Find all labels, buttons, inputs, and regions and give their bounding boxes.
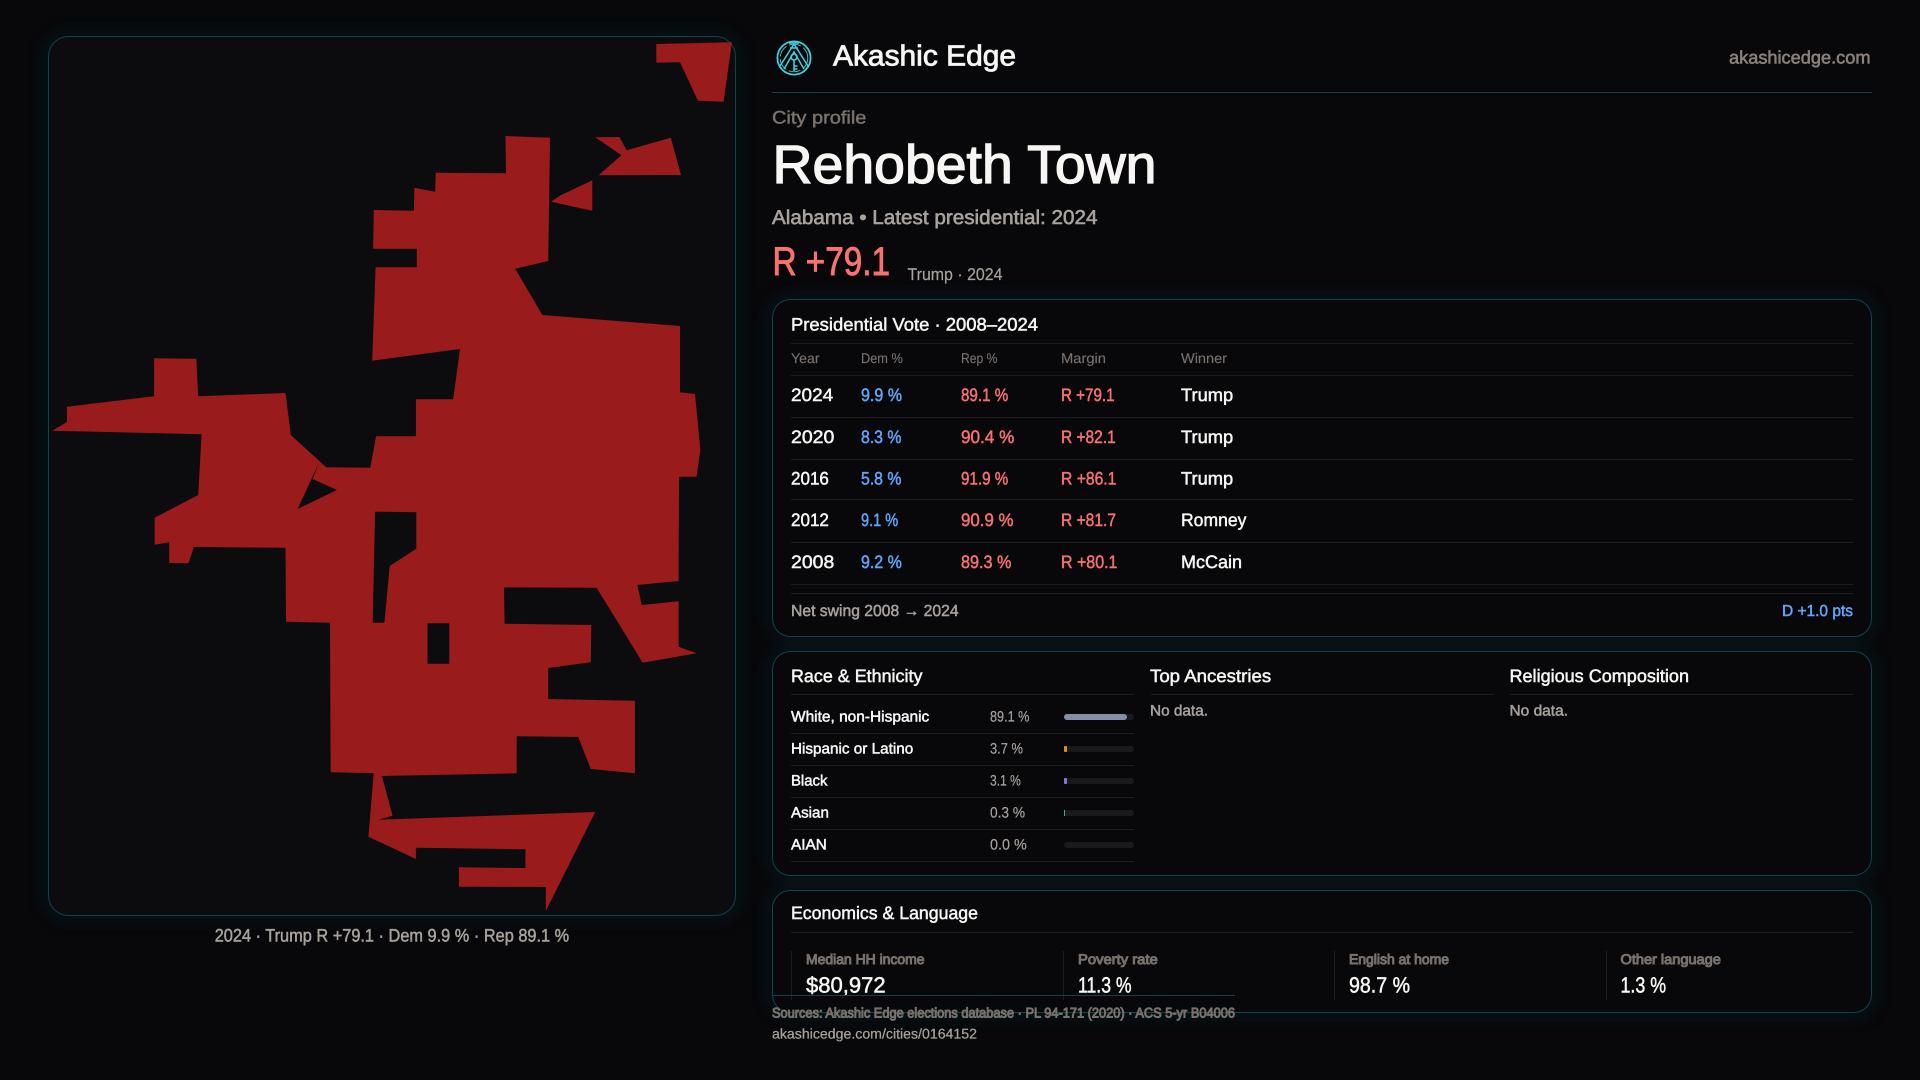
- stat: english at home: English at home: [1349, 951, 1449, 967]
- table header row: Rep %: [961, 350, 997, 366]
- stat: other language: 1.3 %: [1620, 973, 1666, 998]
- race row: black: Black: [791, 773, 828, 790]
- race row: white: [791, 709, 1134, 726]
- race row: hispanic: Hispanic or Latino: [791, 741, 913, 758]
- panel: demographics: [772, 652, 1872, 876]
- table header row: Margin: [1061, 350, 1106, 366]
- table heading: Presidential Vote · 2008–2024: [791, 314, 1038, 334]
- race row: aian: [791, 837, 1134, 854]
- heading: top ancestries: Top Ancestries: [1150, 666, 1271, 686]
- headline margin: R +79.1: [772, 240, 890, 284]
- brand name: Akashic Edge: [833, 41, 1016, 73]
- race row: hispanic: [791, 741, 1134, 758]
- stat: other language: [1620, 951, 1721, 998]
- row 2012: [791, 510, 1246, 530]
- row 2024: 9.9 %: [861, 385, 902, 405]
- row 2008: 9.2 %: [861, 552, 902, 572]
- row 2016: Trump: [1181, 468, 1233, 488]
- footer sources: Sources: Akashic Edge elections database · PL 94-171 (2020) · ACS 5-yr B04006: [772, 1005, 1235, 1021]
- race row: hispanic: 3.7 %: [990, 741, 1023, 758]
- row 2008: R +80.1: [1061, 552, 1117, 572]
- footer sources: [772, 996, 1235, 1041]
- row 2016: 5.8 %: [861, 468, 901, 488]
- stat: other language: Other language: [1620, 951, 1721, 967]
- race row: asian: [791, 805, 1134, 822]
- race row: aian: 0.0 %: [990, 837, 1027, 854]
- title: Rehobeth Town: [772, 135, 1156, 195]
- panel: economics and language: [772, 890, 1872, 1012]
- table header row: Dem %: [861, 350, 903, 366]
- panel: map of Rehobeth Town: [48, 36, 736, 916]
- stat: english at home: [1349, 951, 1449, 998]
- race row: asian: 0.3 %: [990, 805, 1025, 822]
- stat: median income: [806, 951, 925, 998]
- row 2020: R +82.1: [1061, 427, 1116, 447]
- race row: asian: Asian: [791, 805, 829, 822]
- map caption: 2024 · Trump R +79.1 · Dem 9.9 % · Rep 89.1 %: [215, 926, 569, 946]
- table header row: Year: [791, 350, 820, 366]
- row 2020: Trump: [1181, 427, 1233, 447]
- stat: median income: $80,972: [806, 973, 886, 998]
- row 2012: 90.9 %: [961, 510, 1014, 530]
- row 2008: [791, 552, 1242, 572]
- race row: white: White, non-Hispanic: [791, 709, 930, 726]
- row 2008: 2008: [791, 552, 834, 572]
- heading: religious composition: Religious Composition: [1510, 666, 1689, 686]
- row 2024: [791, 385, 1233, 405]
- row 2008: 89.3 %: [961, 552, 1011, 572]
- stat: english at home: 98.7 %: [1349, 973, 1410, 998]
- table header row: Winner: [1181, 350, 1227, 366]
- row 2020: [791, 427, 1233, 447]
- icon: Akashic Edge logo: [777, 41, 811, 75]
- ancestries empty state: No data.: [1150, 703, 1208, 720]
- row 2012: 2012: [791, 510, 829, 530]
- heading: economics: Economics & Language: [791, 903, 978, 923]
- race row: white: 89.1 %: [990, 709, 1029, 726]
- religion empty state: No data.: [1510, 703, 1568, 720]
- row 2016: [791, 468, 1233, 488]
- row 2016: 2016: [791, 468, 829, 488]
- net swing value: D +1.0 pts: [1782, 603, 1853, 620]
- row 2024: 2024: [791, 385, 833, 405]
- site url: akashicedge.com: [1729, 47, 1870, 67]
- row 2016: R +86.1: [1061, 468, 1116, 488]
- row 2008: McCain: [1181, 552, 1242, 572]
- subtitle: Alabama • Latest presidential: 2024: [772, 207, 1098, 229]
- row 2012: R +81.7: [1061, 510, 1116, 530]
- row 2016: 91.9 %: [961, 468, 1008, 488]
- map shape: city boundary: [52, 42, 732, 911]
- row 2024: Trump: [1181, 385, 1233, 405]
- stat: poverty: 11.3 %: [1078, 973, 1132, 998]
- race row: black: 3.1 %: [990, 773, 1021, 790]
- stat: poverty: [1078, 951, 1158, 998]
- panel: presidential vote table: [772, 300, 1872, 636]
- stat: poverty: Poverty rate: [1078, 951, 1158, 967]
- row 2020: 8.3 %: [861, 427, 901, 447]
- row 2024: 89.1 %: [961, 385, 1008, 405]
- heading: race and ethnicity: Race & Ethnicity: [791, 666, 922, 686]
- race row: aian: AIAN: [791, 837, 827, 854]
- row 2012: 9.1 %: [861, 510, 898, 530]
- margin note: Trump · 2024: [908, 265, 1002, 284]
- row 2012: Romney: [1181, 510, 1246, 530]
- net swing label: Net swing 2008 → 2024: [791, 603, 959, 620]
- eyebrow: city profile: City profile: [772, 108, 866, 128]
- row 2020: 2020: [791, 427, 834, 447]
- table header row: [791, 350, 1227, 366]
- stat: median income: Median HH income: [806, 951, 925, 967]
- footer sources: akashicedge.com/cities/0164152: [772, 1025, 977, 1041]
- row 2020: 90.4 %: [961, 427, 1014, 447]
- race row: black: [791, 773, 1134, 790]
- row 2024: R +79.1: [1061, 385, 1115, 405]
